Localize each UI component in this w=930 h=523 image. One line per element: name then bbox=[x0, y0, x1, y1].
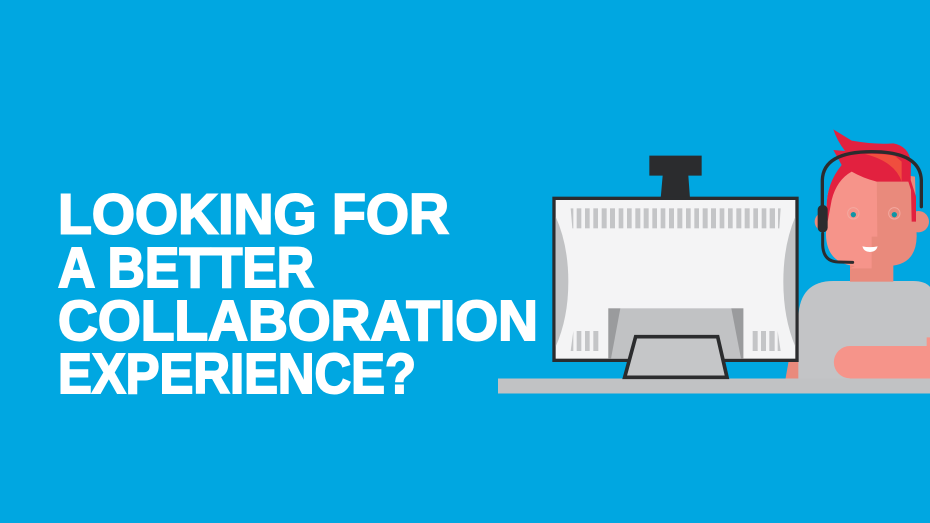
illustration: monitor back bbox=[554, 156, 797, 377]
smile bbox=[862, 246, 878, 252]
title: LOOKING FOR bbox=[58, 182, 449, 246]
bottom vents bbox=[571, 331, 781, 351]
stand mount bbox=[608, 308, 743, 359]
face bbox=[826, 170, 917, 268]
title: EXPERIENCE? bbox=[58, 342, 416, 406]
stand foot bbox=[625, 337, 727, 377]
hair bbox=[827, 129, 916, 222]
neck bbox=[850, 262, 893, 282]
left arm bbox=[785, 340, 813, 382]
right arm bbox=[834, 337, 930, 382]
headset bbox=[818, 152, 921, 262]
top vents bbox=[571, 208, 781, 228]
eyes bbox=[848, 208, 900, 219]
side shading bbox=[556, 217, 795, 347]
title: A BETTER bbox=[58, 236, 314, 300]
ears bbox=[815, 211, 929, 232]
illustration: person with headset bbox=[785, 129, 930, 382]
monitor casing bbox=[554, 198, 797, 360]
desk bbox=[498, 378, 930, 394]
title bbox=[58, 182, 538, 406]
webcam bbox=[649, 156, 702, 198]
torso bbox=[798, 281, 930, 382]
title: COLLABORATION bbox=[58, 289, 538, 353]
